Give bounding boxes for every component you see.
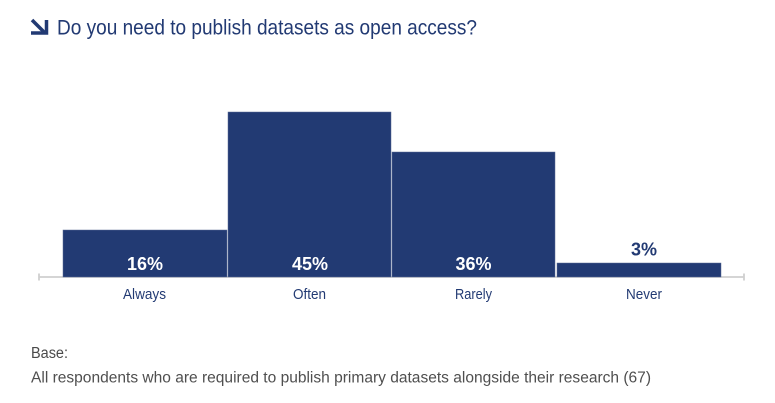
bar: Always 16% bbox=[63, 230, 227, 277]
base description: All respondents who are required to publish primary datasets alongside their research (67) bbox=[31, 370, 651, 386]
axis line bbox=[39, 274, 744, 280]
icon: arrow pointing down-right bbox=[31, 20, 46, 33]
chart: histogram of responses bbox=[39, 112, 744, 303]
bar: Rarely 36%: 36% bbox=[456, 253, 492, 274]
bar: Always 16%: 16% bbox=[127, 253, 163, 274]
category label: Always: Always bbox=[123, 286, 166, 303]
category label: Rarely: Rarely bbox=[455, 286, 492, 303]
category label: Never: Never bbox=[626, 286, 662, 303]
bar: Never 3%: 3% bbox=[631, 238, 657, 260]
bar: Often 45%: 45% bbox=[292, 253, 328, 274]
bar: Never 3% bbox=[557, 238, 721, 277]
title: Do you need to publish datasets as open access? bbox=[57, 16, 477, 40]
base heading: Base: bbox=[31, 345, 68, 362]
bar: Rarely 36% bbox=[392, 152, 555, 277]
category label: Often: Often bbox=[293, 286, 326, 303]
bar: Often 45% bbox=[228, 112, 391, 277]
